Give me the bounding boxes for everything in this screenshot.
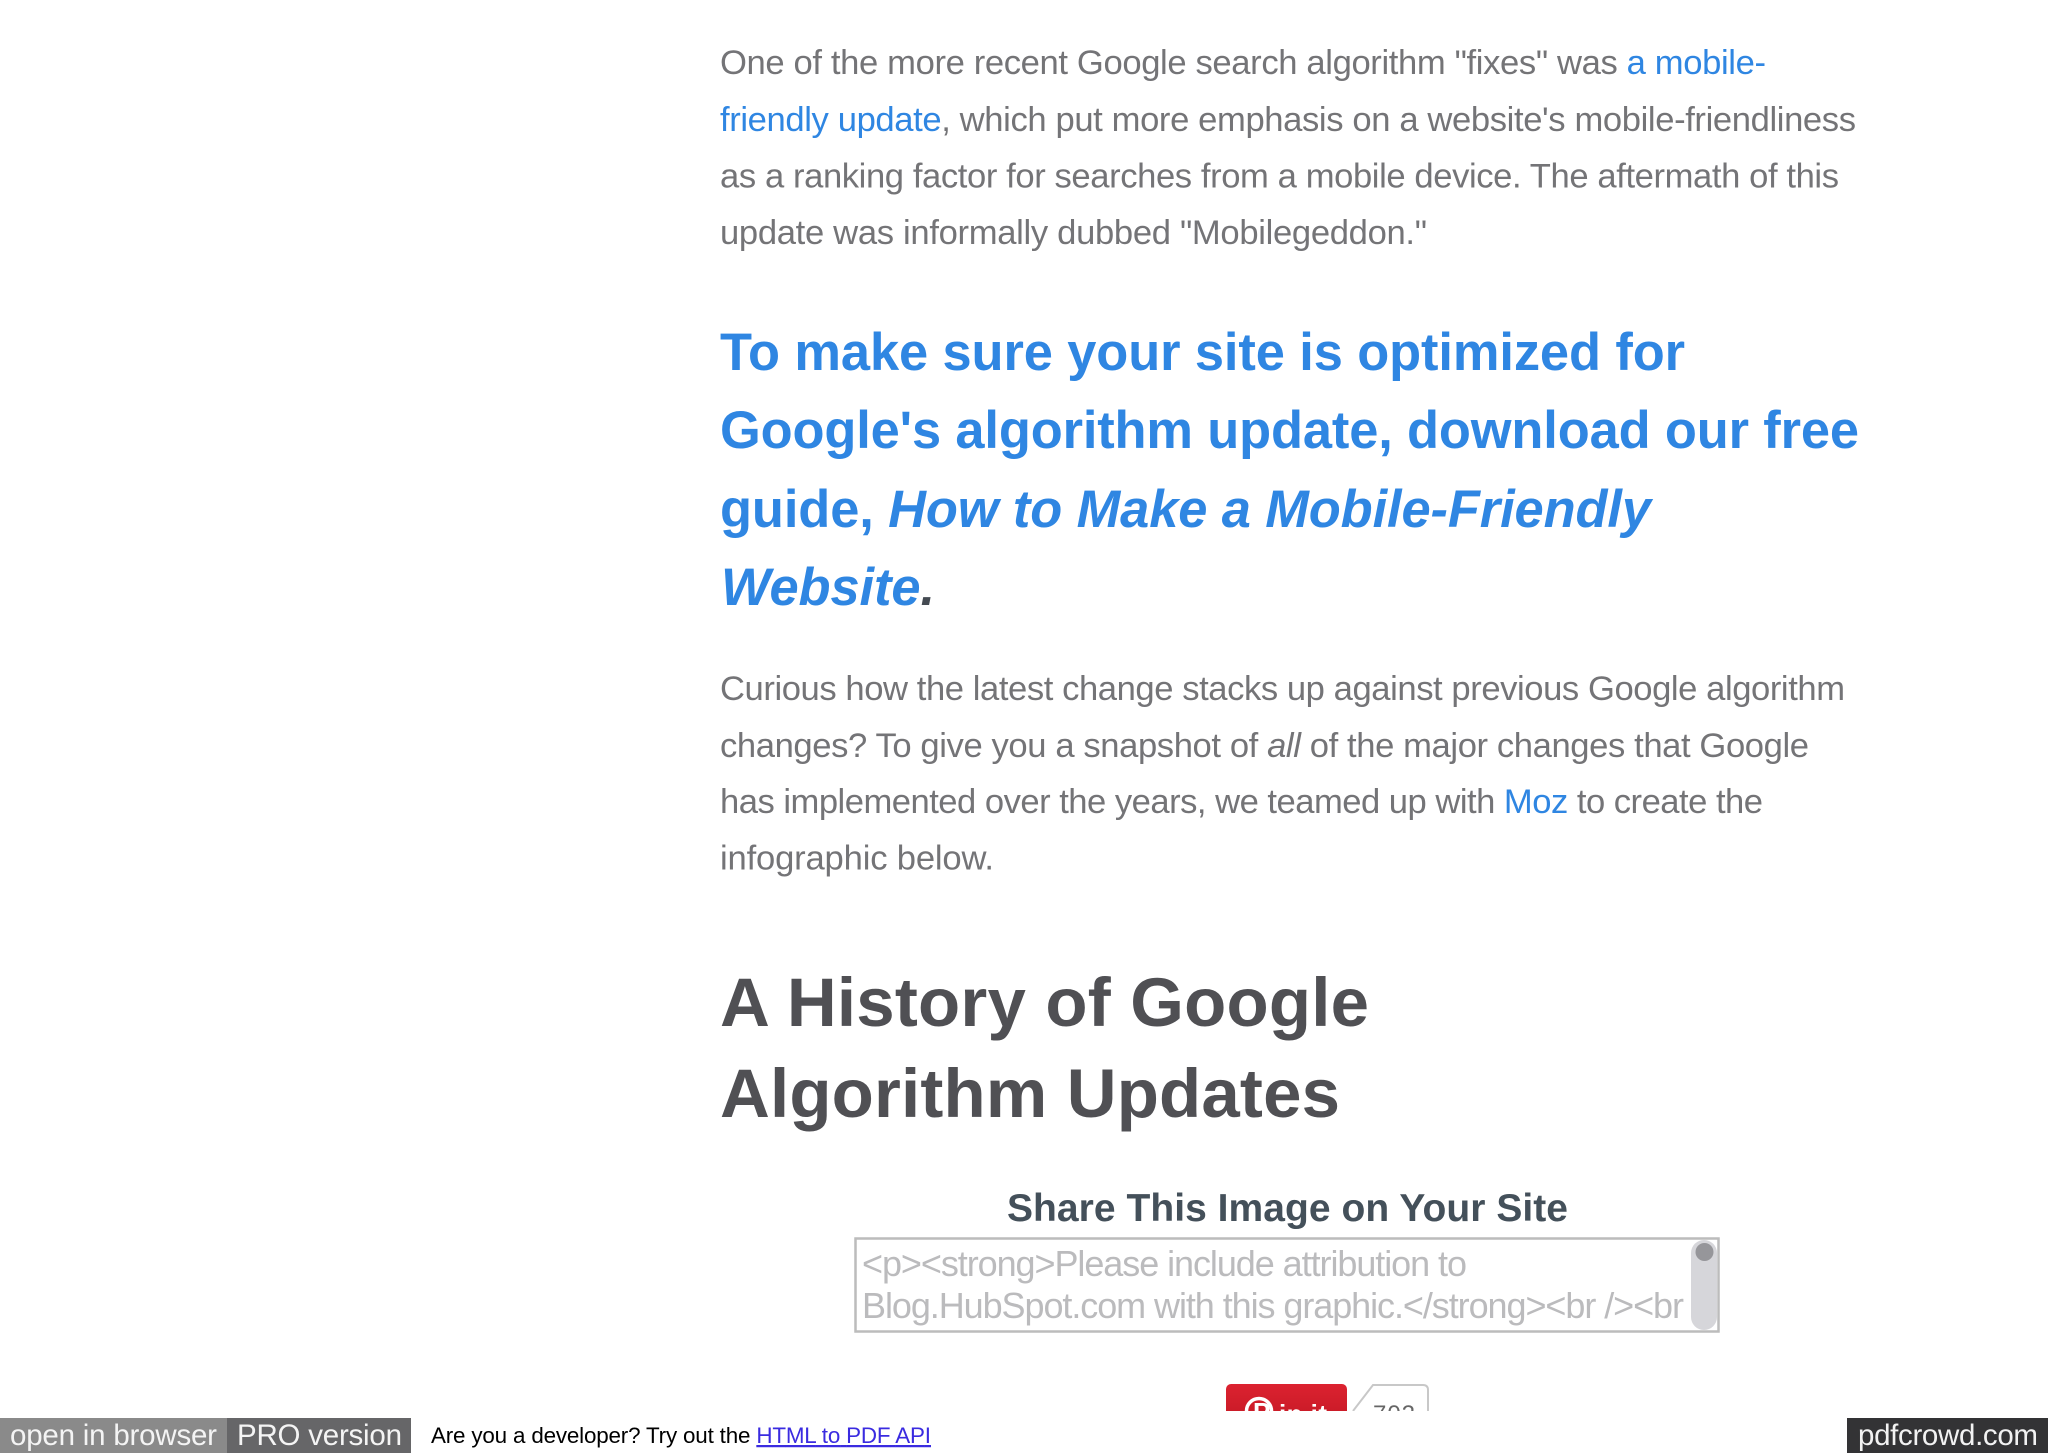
text block: intro paragraph: update was informally dubbed "Mobilegeddon.": [720, 214, 1427, 252]
embed code box: Blog.HubSpot.com with this graphic.</strong><br /><br: [862, 1285, 1684, 1326]
text block: second paragraph: infographic below.: [720, 840, 994, 878]
text block: intro paragraph: [720, 44, 1856, 252]
embed code box: <p><strong>Please include attribution to: [862, 1243, 1467, 1284]
heading: call to action: To make sure your site is optimized for: [720, 324, 1685, 382]
title: [720, 964, 1369, 1132]
text block: second paragraph: [720, 670, 1845, 878]
footer: pdfcrowd badge: pdfcrowd.com: [1858, 1419, 2038, 1452]
pin it button with counter: P: [1253, 1397, 1270, 1427]
heading: call to action: Website.: [721, 559, 935, 617]
text block: second paragraph: changes? To give you a snapshot of all of the major changes that Google: [720, 727, 1809, 765]
pin it button with counter: 702: [1373, 1401, 1415, 1428]
footer: developer message: Are you a developer? Try out the HTML to PDF API: [431, 1423, 931, 1448]
text block: second paragraph: Curious how the latest change stacks up against previous Google algorithm: [720, 670, 1845, 708]
scrollbar: [1691, 1240, 1717, 1330]
footer: pro version button: PRO version: [237, 1419, 402, 1452]
footer: open in browser button: open in browser: [10, 1419, 217, 1452]
share heading: Share This Image on Your Site: [1007, 1187, 1568, 1230]
text block: intro paragraph: One of the more recent Google search algorithm "fixes" was a mobile-: [720, 44, 1766, 82]
pin it button with counter: in it: [1279, 1399, 1327, 1429]
text block: intro paragraph: friendly update, which put more emphasis on a website's mobile-friendliness: [720, 101, 1856, 139]
pin it button with counter: [1226, 1384, 1429, 1411]
text block: second paragraph: has implemented over the years, we teamed up with Moz to create the: [720, 783, 1763, 821]
heading: call to action: Google's algorithm update, download our free: [720, 402, 1859, 460]
heading: call to action: [720, 324, 1859, 617]
title: Algorithm Updates: [720, 1055, 1340, 1132]
heading: call to action: guide, How to Make a Mobile-Friendly: [720, 481, 1654, 539]
title: A History of Google: [720, 964, 1369, 1041]
text block: intro paragraph: as a ranking factor for searches from a mobile device. The aftermath of this: [720, 158, 1839, 196]
embed code box: [856, 1238, 1718, 1332]
